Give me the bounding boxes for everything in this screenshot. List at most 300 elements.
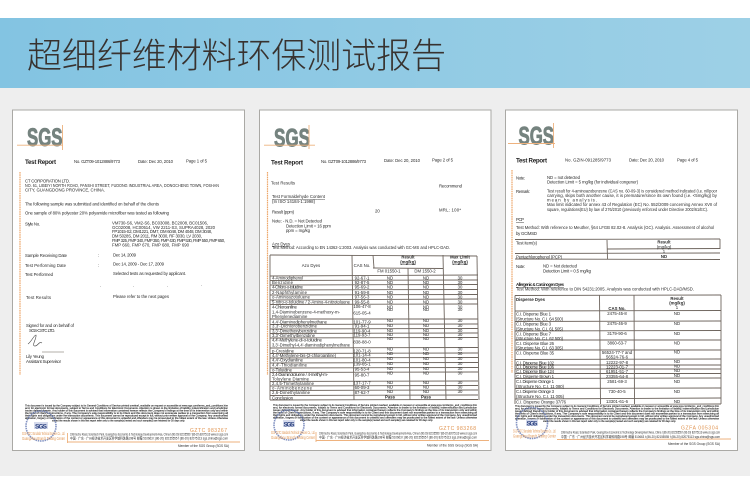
footer: 198 Kezhu Road, Scientech Park, Guangzhou Economic & Technology Development Area, China t (86-20) 82155555 f (86-20) 82075113 www.cn.sgs.com [319,432,477,436]
table: azo dye results: 2-Naphthylamine [272,290,308,295]
table: azo dye results: 30 [458,300,463,304]
notes and remarks: Detection Limit = 5 mg/kg (for individual congener) [547,180,639,184]
table: disperse dye results: 730-40-5 [608,389,626,394]
table: azo dye results: 2,4,5-Trimethylaniline [272,381,315,386]
table: disperse dye results: ND [674,379,680,384]
table: azo dye results: ND [423,336,429,341]
notes and remarks: mean by analysis. [547,198,597,202]
table: azo dye results: ND [387,361,393,366]
table: azo dye results: ND [387,332,393,337]
table: azo dye results: ND [387,356,393,361]
table: azo dye results: 30 [458,366,463,371]
client and sample information: DM 5028S, DM 2011, RM 3030, RF 3030, LV 2030, [112,234,202,239]
table: azo dye results: 30 [458,380,463,385]
test results intro: 20 [375,208,380,214]
report header line: No. GZT09-1012886/9773 [74,159,121,164]
report header line: Test Report [516,158,547,164]
table: disperse dye results: CAS No. [608,306,626,311]
table: azo dye results: 1,4-Diaminobenzene-4-methoxy-m- [272,310,341,314]
table: azo dye results: ND [387,384,393,390]
notes and remarks: carrying, skips both another cause, it is premature/since its own found (i.e. <5mg/kg) by [547,193,718,198]
table: azo dye results: Pass [385,394,396,400]
table: disperse dye results: C.I. Disperse Orange 3 [516,389,555,394]
table: azo dye results: 3,3'-Dichlorobenzidine [272,324,318,328]
client and sample information: NO. 61, LIBEIYI NORTH ROAD, PANSHI STREET, FUDONG INDUSTRIAL AREA, DONGCHENG TOWN, FOSHAN [25,183,219,188]
table: azo dye results: ND [423,351,429,356]
test results intro: Recommend [439,184,463,188]
table: azo dye results: 87-62-7 [355,390,370,395]
table: azo dye results: ND [423,361,429,366]
table: azo dye results: 139-65-1 [353,362,371,366]
table: azo dye results: o-Toluidine [272,368,293,372]
table: azo dye results: 95-53-4 [355,366,370,372]
client and sample information: FP1015-S2, DM1221, DM7, DM 6048, DM 4048, DM 3048, [112,229,212,234]
table: PCP result: Pentachlorophenol (PCP) [516,254,563,260]
test results intro: ppm = mg/kg [286,228,311,233]
table: azo dye results: ND [423,332,429,337]
table: azo dye results: 30 [458,336,463,341]
table: azo dye results: 106-47-8 [353,304,371,309]
table: azo dye results: ND [423,300,429,304]
table: disperse dye results: 2475-45-8 [607,311,627,316]
footer [271,426,489,448]
table: azo dye results: Result [401,254,415,260]
table: azo dye results: 119-93-7 [354,332,371,338]
test results intro: Detection Limit = 16 ppm [286,224,331,228]
table: azo dye results: ND [387,307,393,312]
table: azo dye results: ND [423,304,429,310]
table: disperse dye results: 61951-51-7 [606,369,629,374]
table: azo dye results: ND [387,276,393,280]
test results intro: Azo Dyes [272,242,290,246]
table: azo dye results: Conclusion [272,396,294,400]
icon: SGS logo: SGS [518,122,554,150]
table: PCP result: ND = Not detected [543,264,578,268]
table: azo dye results: 101-80-4 [353,358,371,362]
table: azo dye results: 2,6-Dimethylaniline [272,390,311,395]
table: azo dye results: 30 [458,332,463,337]
client and sample information: Style No. [25,222,40,226]
fine print disclaimer: the limits of Client's instructions, if any. The Company's sole responsibility is to its Client and this document does not exonerate parties to a transaction from exercising all [273,410,477,414]
footer: Guangzhou Branch Testing Center [513,434,556,438]
table: PCP result: Test item(s) [516,240,538,246]
report header line: Date: Dec 20, 2010 [629,158,665,162]
fine print disclaimer: issues defined therein. Any holder of this document is advised that information contained hereon reflects the Company's findings at the time of its intervention only and within [515,409,719,413]
footer: SGS-CSTC Standards Technical Services Co., Ltd. [22,431,65,436]
client and sample information: One sample of 80% polyester 20% polyamide microfiber was tested as following [25,210,170,216]
table: azo dye results: ND [387,389,393,394]
footer: 中国 · 广东 · 广州经济技术开发区科学城科珠路198号 邮编 510663 t (86-20) 82155555 f (86-20) 82075113 sgs.china@sgs.com [561,434,720,439]
table: azo dye results: ND [423,328,429,333]
client and sample information: Please refer to the next pages [113,294,169,299]
footer: 中国 · 广东 · 广州经济技术开发区科学城科珠路198号 邮编 510663 t (86-20) 82155555 f (86-20) 82075113 sgs.china@sgs.com [319,434,477,440]
stamp: SGS [284,422,295,428]
table: disperse dye results: (Structure No. C.I. 62 500) [516,336,564,341]
client and sample information: . [167,283,168,288]
table: azo dye results: 30 [458,361,463,366]
notes and remarks: by GC/MSD [516,231,537,236]
footer: 198 Kezhu Road, Scientech Park, Guangzhou Economic & Technology Development Area, China t (86-20) 82155555 f (86-20) 82075113 www.cn.sgs.com [70,432,228,436]
table: azo dye results: ND [423,384,429,390]
table: azo dye results: (mg/kg) [400,260,416,264]
fine print disclaimer: stated the results shown in this test report refer only to the sample(s) tested and such sample(s) are retained for 30 days only. [52,418,185,422]
table: azo dye results: 3,3'-Dimethyl-4,4'-diaminodiphenylmethane [272,342,351,348]
report header line: Date: Dec 20, 2010 [138,159,174,164]
table: azo dye results: 91-94-1 [355,324,370,328]
table: disperse dye results: 23355-64-8 [606,374,629,379]
table: azo dye results: 97-56-3 [355,294,370,300]
notes and remarks: Note: [516,176,525,180]
icon: SGS logo [508,122,555,150]
table: azo dye results: ND [387,300,393,304]
table: azo dye results: p-Cresidine [272,348,295,354]
fine print disclaimer: issues defined therein. Any holder of this document is advised that information contained hereon reflects the Company's findings at the time of its intervention only and within [273,408,477,412]
table: azo dye results: 30 [458,290,463,295]
notes and remarks: ND = not detected [547,175,581,180]
fine print disclaimer: their rights and obligations under the transaction documents. This document cannot be reproduced except in full, without prior written approval of the Company. Any unauthorized [25,414,228,418]
table: azo dye results: Pass [421,394,432,400]
fine print disclaimer: alteration, forgery or falsification of the content or appearance of this document is unlawful and offenders may be prosecuted to the fullest extent of the law. Unless otherwise [25,416,228,420]
table: PCP result: (mg/kg) [657,244,672,250]
table: PCP result: Note: [516,264,525,269]
test results intro: Test Results [271,180,295,186]
panel: report page 3 [506,110,738,450]
table: disperse dye results: ND [674,359,680,364]
table: azo dye results: 5-nitro-o-toluidine / 2-Amino-4-nitrotoluene [272,300,351,304]
table: azo dye results: (mg/kg) [452,260,468,264]
table: disperse dye results: 3179-90-6 [607,331,627,336]
table: azo dye results: Max Limit [450,254,470,260]
table: azo dye results: 30 [458,323,463,328]
report header line [516,158,699,164]
client and sample information: Dec 14, 2009 - Dec 17, 2009 [113,262,165,266]
panel: report page 1 [12,110,244,450]
test results intro [271,180,463,250]
report header line: No. GZT09-1012886/9773 [321,159,367,164]
table: azo dye results: 91-59-8 [355,290,370,295]
table: azo dye results: 30 [458,276,463,280]
report header line [271,158,454,166]
fine print disclaimer: alteration, forgery or falsification of the content or appearance of this document is unlawful and offenders may be prosecuted to the fullest extent of the law. Unless otherwise [515,416,719,420]
stamp: SGS [526,420,538,428]
client and sample information: Sample Receiving Date [25,253,68,258]
table: azo dye results: 615-05-4 [353,310,371,316]
stamp [26,411,56,441]
table: disperse dye results: ND [674,399,680,404]
footer: Member of the SGS Group (SGS SA) [178,444,229,448]
client and sample information: Test Results [26,295,51,300]
table: disperse dye results: Result [670,296,684,301]
table: azo dye results: Phenylenediamine [272,314,308,319]
table: azo dye results: ND [423,290,429,295]
client and sample information: CITY, GUANGDONG PROVINCE, CHINA. [25,187,105,192]
footer: Guangzhou Branch Testing Center [22,436,65,441]
table: azo dye results: 60-09-3 [355,385,370,390]
panel: report page 2 [260,110,491,450]
client and sample information: Test Performing Date [25,263,67,268]
title banner [0,18,750,88]
table: azo dye results: 4,4'-Oxydianiline [272,358,304,362]
fine print disclaimer: This document is issued by the Company subject to its General Conditions of Service printed overleaf, available on request or accessible at www.sgs.com/terms_and_conditions.htm [25,404,229,408]
fine print disclaimer: their rights and obligations under the transaction documents. This document cannot be reproduced except in full, without prior written approval of the Company. Any unauthorized [515,414,719,418]
client and sample information [25,178,225,300]
table: azo dye results: 838-88-0 [353,340,371,344]
client and sample information: VM730-S6, VM2-S6, BC03008, BC2008, BC01506, [112,220,208,226]
table: disperse dye results: C.I. Disperse Blue 7 [516,332,552,336]
table: PCP result [515,239,720,292]
test results intro: Test Formaldehyde Content [272,194,326,199]
footer: Member of the SGS Group (SGS SA) [427,444,478,448]
table: azo dye results: 30 [458,307,463,312]
table: disperse dye results: ND [674,368,680,373]
signature block: Lily Yeung [26,354,45,359]
fine print disclaimer [273,403,478,422]
fine print disclaimer: the limits of Client's instructions, if any. The Company's sole responsibility is to its Client and this document does not exonerate parties to a transaction from exercising all [515,412,719,416]
table: disperse dye results: C.I. Disperse Blue 3 [516,322,552,326]
table: disperse dye results: 1 [676,305,679,310]
table: azo dye results: 30 [458,304,463,310]
table: disperse dye results: ND [674,364,680,368]
client and sample information: GC02008, HC00514, VW 2211-S3, SUPRA4028, 2020 [112,225,216,230]
grey background [0,88,750,476]
notes and remarks [516,175,718,236]
table: azo dye results: 30 [458,280,463,285]
notes and remarks: PCP [516,217,524,222]
table: disperse dye results: 13301-61-6 [606,399,629,404]
table: azo dye results: 101-14-4 [353,352,371,358]
table: azo dye results: 4-Chloroaniline [272,304,298,310]
table: azo dye results: ND [423,276,429,280]
table: disperse dye results: ND [674,389,680,394]
fine print disclaimer: and, for electronic format documents, subject to Terms and Conditions for Electronic Documents. Attention is drawn to the limitation of liability, indemnification and jurisdiction [515,406,719,410]
table: azo dye results: ND [423,284,429,290]
table: disperse dye results: 12222-97-8 [606,360,629,365]
footer: GZFA 005304 [681,426,718,432]
report header line: No. GZIN-091285/9773 [565,158,612,162]
table: azo dye results: Benzidine [272,280,294,285]
table: azo dye results: ND [387,323,393,328]
icon: SGS logo [17,124,63,152]
icon: SGS logo: SGS [274,124,310,152]
table: disperse dye results: C.I. Disperse Brown 1 [516,374,555,379]
table: PCP result: Detection Limit = 0.5 mg/kg [543,268,592,274]
table: PCP result: Result [657,240,671,244]
client and sample information: Dec 14, 2009 [113,252,137,258]
fine print disclaimer: alteration, forgery or falsification of the content or appearance of this document is unlawful and offenders may be prosecuted to the fullest extent of the law. Unless otherwise [273,416,477,420]
client and sample information: . [100,283,101,288]
client and sample information: . [133,283,134,288]
table: PCP result: ND [661,254,667,259]
table: azo dye results: 30 [458,318,463,323]
table: azo dye results: ND [387,280,393,285]
table: disperse dye results: (Structure No. C.I. 61 505) [516,326,564,332]
footer: GZTC 983268 [439,426,476,432]
table: azo dye results: ND [423,323,429,328]
fine print disclaimer: This document is issued by the Company subject to its General Conditions of Service printed overleaf, available on request or accessible at www.sgs.com/terms_and_conditions.htm [273,403,478,407]
table: azo dye results: ND [423,366,429,371]
table: disperse dye results: C.I. Disperse Orange 1 [516,379,555,384]
table: azo dye results: ND [387,304,393,310]
signature block: Assistant Supervisor [26,359,62,364]
table: azo dye results: 101-77-9 [353,320,371,324]
table: azo dye results: ND [423,370,429,376]
report header line: Page 2 of 5 [432,158,454,162]
table: disperse dye results: ND [674,340,680,346]
table: azo dye results: ND [387,380,393,385]
table: disperse dye results: C.I. Disperse Blue 106 [516,364,555,370]
table: azo dye results: o-Aminobenzene [272,386,313,390]
table: azo dye results: 4-Chloro-o-toluidine [272,284,304,290]
table: azo dye results: ND [387,290,393,295]
table: azo dye results: 99-55-8 [355,300,370,304]
table: azo dye results: CAS No. [354,263,370,268]
report header line [25,158,208,166]
table: disperse dye results: C.I. Disperse Blue 102 [516,360,555,366]
table: azo dye results: 30 [458,370,463,376]
table: azo dye results: 95-69-2 [355,284,370,290]
table: azo dye results: ND [423,389,429,394]
table: disperse dye results: C.I. Disperse Orange 37/76 [516,400,567,404]
table: azo dye results: ND [423,318,429,323]
signature block [26,323,75,364]
footer: GZTC 983267 [190,428,227,434]
table: azo dye results: 30 [458,351,463,356]
fine print disclaimer [25,404,229,422]
test results intro: Note: - N.D. = Not Detected [272,218,323,224]
table: disperse dye results [515,295,721,405]
test results intro: Test Method: According to EN 14362-1:2003. Analysis was conducted with GC-MS and HPLC-DAD. [272,245,450,250]
table: azo dye results: ND [387,351,393,356]
table: PCP result: Allergenic & Carcinogen Dyes [516,282,565,287]
table: azo dye results: Azo Dyes [302,263,320,268]
table: azo dye results: 4,4'-Methylene-bis-(2-chloroaniline) [272,353,337,358]
footer [513,426,731,446]
footer: Guangzhou Branch Testing Center [271,435,315,440]
table: disperse dye results: ND [674,373,680,378]
table: azo dye results: 30 [458,284,463,290]
table: azo dye results: 30 [458,384,463,390]
table: azo dye results: 3,3'-Dimethylbenzidine [272,333,316,338]
table: azo dye results: ND [387,318,393,323]
report header line: Test Report [271,160,303,166]
client and sample information: The following sample was submitted and identified on behalf of the clients [25,201,159,206]
table: disperse dye results: (Structure No. C.I. 11 005) [516,394,565,399]
table: azo dye results: FM 01550-1 [377,268,401,274]
table: azo dye results: ND [387,336,393,341]
table: azo dye results: ND [387,328,393,333]
client and sample information: CT CORPORATION LTD. [25,178,70,184]
table: disperse dye results: 2475-46-9 [607,321,627,326]
table: azo dye results: 30 [458,294,463,300]
footer: 中国 · 广东 · 广州经济技术开发区科学城科珠路198号 邮编 510663 t (86-20) 82155555 f (86-20) 82075113 sgs.china@sgs.com [70,436,228,440]
table: disperse dye results: 12223-01-7 [606,364,629,370]
table: azo dye results: 2,4-Diaminotoluene / 4-methyl-m- [272,372,329,377]
table: PCP result: 1 [663,249,666,254]
table: azo dye results: 30 [458,389,463,394]
notes and remarks: Max limit indicated for annex 43 of Regulation (EC) No. 552/2009 concerning Annex XVII of [547,202,718,207]
fine print disclaimer: the limits of Client's instructions, if any. The Company's sole responsibility is to its Client and this document does not exonerate parties to a transaction from exercising all [25,411,228,415]
table: azo dye results: 4-Aminodiphenyl [272,276,303,280]
table: azo dye results: ND [423,356,429,361]
report header line: Test Report [25,159,56,166]
table: azo dye results: 30 [458,356,463,361]
table: azo dye results: ND [387,366,393,371]
table: azo dye results: DM 1550-2 [414,268,436,274]
client and sample information: Test Performed [25,272,54,277]
stamp [516,408,548,438]
table: azo dye results: ND [423,346,429,352]
table: azo dye results: 4,4'-Methylene-di-o-toluidine [272,338,323,342]
table: disperse dye results: 2581-69-3 [607,379,627,384]
table: azo dye results: ND [387,284,393,290]
fine print disclaimer: stated the results shown in this test report refer only to the sample(s) tested and such sample(s) are retained for 30 days only. [543,419,676,423]
table: disperse dye results: C.I. Disperse Blue 1 [516,312,552,316]
table: azo dye results: Toluylene Diamine [272,376,310,382]
table: azo dye results: 4,4'-Thiodianiline [272,362,308,368]
notes and remarks: Test result for 4-aminoazobenzene (CAS no. 60-09-3) is considered method indicated (i.e. nil/poor [547,188,718,194]
table: disperse dye results: 3860-63-7 [607,340,627,346]
notes and remarks: Remark: [516,189,530,194]
report header line: Page 1 of 5 [186,158,208,164]
table: azo dye results: ND [423,307,429,312]
table: azo dye results: 4,4'-Diaminodiphenylmethane [272,320,328,324]
table: disperse dye results: (Structure No. C.I. 64 500) [516,316,564,322]
fine print disclaimer: stated the results shown in this test report refer only to the sample(s) tested and such sample(s) are retained for 30 days only. [300,418,433,422]
fine print disclaimer: This document is issued by the Company subject to its General Conditions of Service printed overleaf, available on request or accessible at www.sgs.com/terms_and_conditions.htm [515,404,720,408]
table: azo dye results: 30 [458,328,463,333]
fine print disclaimer: their rights and obligations under the transaction documents. This document cannot be reproduced except in full, without prior written approval of the Company. Any unauthorized [273,413,477,417]
stamp: SGS [35,424,48,430]
client and sample information: . [201,282,202,287]
table: disperse dye results: (Structure No. C.I. 63 305) [516,346,564,350]
report header line: Date: Dec 20, 2010 [384,158,421,163]
table: disperse dye results: (mg/kg) [669,300,685,306]
stamp [274,410,304,440]
icon: SGS logo [264,124,315,152]
table: disperse dye results: C.I. Disperse Blue 26 [516,341,555,346]
table: azo dye results: 95-80-7 [355,372,370,378]
table: disperse dye results: ND [674,350,680,354]
table: azo dye results: 92-87-5 [355,280,370,285]
table: disperse dye results: ND [674,331,680,336]
table: azo dye results: 92-67-1 [355,276,370,280]
footer: SGS-CSTC Standards Technical Services Co., Ltd. [513,428,556,434]
notes and remarks: Test Method: With reference to Meuther, §64 LFGB 82.02-8. Analysis (GC). Analysis. Assessment of alcohol [516,225,714,230]
table: azo dye results: 137-17-7 [353,380,371,386]
client and sample information: : [98,262,99,268]
table: disperse dye results: ND [674,311,680,316]
table: azo dye results [270,254,479,400]
fine print disclaimer: issues defined therein. Any holder of this document is advised that information contained hereon reflects the Company's findings at the time of its intervention only and within [25,408,228,412]
table: azo dye results: ND [387,370,393,376]
table: azo dye results: ND [423,280,429,285]
notes and remarks: square, regulations(EU) by law of 276/2010 (previously enforced under Directive 2002/61/EC). [547,207,708,212]
table: azo dye results: 119-90-4 [354,328,371,334]
fine print disclaimer: and, for electronic format documents, subject to Terms and Conditions for Electronic Documents. Attention is drawn to the limitation of liability, indemnification and jurisdiction [25,406,228,410]
fine print disclaimer [514,404,722,424]
table: PCP result: Test Method: With reference to DIN 54231:2005. Analysis was conducted with HPLC-DAD/MSD. [516,286,694,292]
table: disperse dye results: (Structure No. C.I. 11 080) [516,384,565,389]
footer: Member of the SGS Group (SGS SA) [668,442,720,446]
client and sample information: FMP 660, FMP 670, FMP 680, FMP 690 [112,243,190,248]
signature block: SGS-CSTC LTD. [29,328,55,333]
footer: SGS-CSTC Standards Technical Services Co., Ltd. [271,430,315,435]
client and sample information: Selected tests as requested by applicant. [113,271,186,276]
table: azo dye results: ND [423,294,429,300]
client and sample information: : [98,253,99,258]
table: azo dye results: ND [387,346,393,352]
title: 超细纤维材料环保测试报告 [27,37,446,76]
